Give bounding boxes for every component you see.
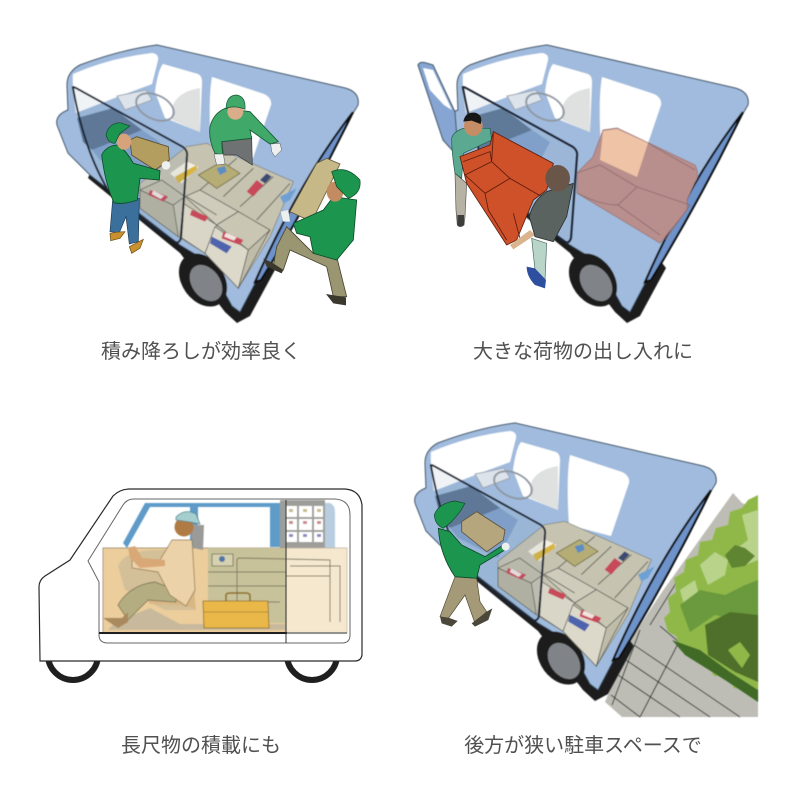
van with open door <box>418 45 748 323</box>
van body outline <box>39 489 362 661</box>
caption: 長尺物の積載にも <box>121 734 281 757</box>
van with cargo <box>415 423 716 701</box>
panel: long items side view <box>39 489 362 757</box>
worker left carrying box <box>102 123 170 253</box>
red sofa and carriers <box>452 113 573 288</box>
driver <box>103 512 200 628</box>
floor and inner window lines <box>88 499 350 643</box>
translucent door panel <box>463 87 577 242</box>
worker carrying box <box>434 501 510 627</box>
caption: 後方が狭い駐車スペースで <box>464 734 702 757</box>
wheels <box>48 630 337 680</box>
worker right lifting box <box>263 158 360 305</box>
interior <box>103 500 347 633</box>
caption: 積み降ろしが効率良く <box>101 340 301 363</box>
green shrub <box>664 495 758 702</box>
panel: tight parking <box>415 423 758 757</box>
van with cargo <box>57 45 358 323</box>
panel: loading efficiently <box>57 45 360 363</box>
panel: large items <box>418 45 748 363</box>
pavement <box>605 493 758 717</box>
worker centre <box>210 95 282 165</box>
caption: 大きな荷物の出し入れに <box>473 340 693 363</box>
ghost sofa inside van <box>577 128 698 243</box>
